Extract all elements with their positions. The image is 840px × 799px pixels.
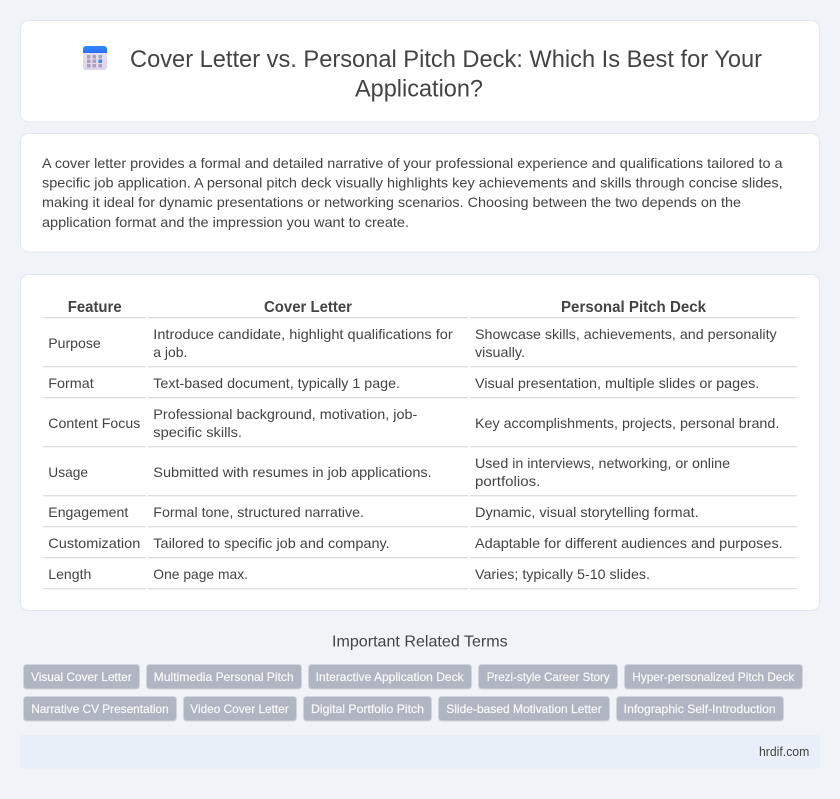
row: purpose [48, 326, 777, 360]
row: purpose: a job. [153, 344, 187, 360]
tag: infographic self-introduction [616, 696, 784, 721]
row: engagement: Dynamic, visual storytelling format. [475, 504, 699, 520]
tag: visual cover letter [24, 664, 140, 689]
tag: prezi-style career story [478, 664, 618, 689]
table header [68, 299, 706, 316]
tag: hyper-personalized pitch deck [624, 664, 802, 689]
row: purpose: Introduce candidate, highlight qualifications for [153, 326, 453, 342]
row: content focus [48, 406, 779, 440]
related terms tags [24, 664, 802, 721]
panel: introduction [20, 134, 820, 252]
icon: calendar [83, 46, 107, 70]
tag: narrative cv presentation [24, 696, 176, 721]
row: usage [48, 455, 730, 489]
table header: Feature [68, 299, 122, 316]
tag: hyper-personalized pitch deck: Hyper-personalized Pitch Deck [632, 670, 795, 684]
title: Application? [355, 76, 483, 102]
row: customization: Customization [48, 535, 140, 551]
row: purpose: visually. [475, 344, 525, 360]
tag: video cover letter: Video Cover Letter [190, 702, 289, 716]
footer [20, 735, 820, 769]
row: format: Format [48, 375, 94, 391]
row: usage: Used in interviews, networking, or online [475, 455, 730, 471]
row: content focus: Content Focus [48, 415, 140, 431]
row: customization: Adaptable for different audiences and purposes. [475, 535, 783, 551]
tag: infographic self-introduction: Infographic Self-Introduction [624, 702, 776, 716]
panel: comparison table [20, 274, 820, 610]
row: length: Varies; typically 5-10 slides. [475, 566, 650, 582]
tag: slide-based motivation letter: Slide-based Motivation Letter [446, 702, 602, 716]
tag: digital portfolio pitch: Digital Portfolio Pitch [311, 702, 424, 716]
intro text [42, 155, 783, 230]
intro text: A cover letter provides a formal and detailed narrative of your professional experience and qualifications tailored to a [42, 155, 783, 171]
intro text: specific job application. A personal pitch deck visually highlights key achievements and skills through concise slides, [42, 175, 783, 191]
tag: interactive application deck: Interactive Application Deck [316, 670, 465, 684]
title [130, 46, 762, 102]
footer source: hrdif.com [759, 744, 809, 759]
row: engagement: Formal tone, structured narrative. [153, 504, 364, 520]
row: format [48, 375, 759, 391]
row: length: Length [48, 566, 91, 582]
tag: video cover letter [184, 696, 296, 721]
tag: multimedia personal pitch: Multimedia Personal Pitch [154, 670, 294, 684]
tag: visual cover letter: Visual Cover Letter [31, 670, 132, 684]
panel: header [20, 20, 820, 122]
row: engagement [48, 504, 699, 520]
tag: slide-based motivation letter [438, 696, 610, 721]
row: format: Text-based document, typically 1 page. [153, 375, 400, 391]
row: customization [48, 535, 783, 551]
row: content focus: Key accomplishments, projects, personal brand. [475, 415, 779, 431]
row: purpose: Showcase skills, achievements, and personality [475, 326, 777, 342]
row: usage: portfolios. [475, 473, 540, 489]
intro text: making it ideal for dynamic presentations or networking scenarios. Choosing between the two depends on the [42, 194, 741, 210]
row: purpose: Purpose [48, 335, 101, 351]
title: Cover Letter vs. Personal Pitch Deck: Which Is Best for Your [130, 46, 762, 73]
row: format: Visual presentation, multiple slides or pages. [475, 375, 759, 391]
row: length [48, 566, 650, 582]
row: usage: Usage [48, 464, 88, 480]
row: usage: Submitted with resumes in job applications. [153, 464, 432, 480]
table header: Cover Letter [264, 299, 352, 316]
table header: Personal Pitch Deck [561, 299, 706, 316]
tag: digital portfolio pitch [304, 696, 432, 721]
table rules [43, 317, 797, 589]
row: content focus: Professional background, motivation, job- [153, 406, 418, 422]
row: engagement: Engagement [48, 504, 128, 520]
heading: important related terms: Important Related Terms [332, 634, 508, 651]
tag: multimedia personal pitch [146, 664, 302, 689]
tag: narrative cv presentation: Narrative CV Presentation [31, 702, 169, 716]
row: customization: Tailored to specific job and company. [153, 535, 390, 551]
intro text: application format and the impression you want to create. [42, 214, 409, 230]
row: content focus: specific skills. [153, 424, 242, 440]
tag: prezi-style career story: Prezi-style Career Story [487, 670, 610, 684]
tag: interactive application deck [308, 664, 472, 689]
row: length: One page max. [153, 566, 248, 582]
